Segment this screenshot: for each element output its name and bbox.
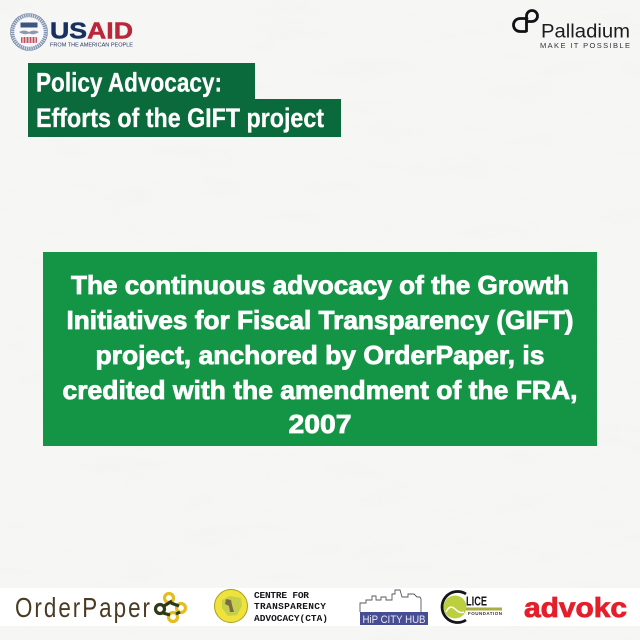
message text: credited with the amendment of the FRA,: [62, 375, 578, 405]
USAID wordmark: USAID: [50, 18, 133, 44]
strip background: [0, 588, 640, 626]
title background: [28, 63, 341, 137]
message text: 2007: [288, 409, 352, 439]
CTA name: CENTRE FOR: [254, 590, 309, 601]
logo: Hip City Hub: HiP CITY HUB: [362, 614, 426, 626]
logo: Hip City Hub: [360, 590, 428, 626]
Clice name: LICE: [466, 594, 487, 608]
logo: USAID: [10, 14, 133, 50]
partner logo strip: [0, 588, 640, 626]
CTA name: [254, 590, 328, 624]
USAID tagline: FROM THE AMERICAN PEOPLE: [50, 42, 133, 48]
Palladium tagline: MAKE IT POSSIBLE: [540, 41, 630, 50]
logo: Centre for Transparency Advocacy: [214, 590, 328, 624]
panel: key message: [43, 252, 597, 446]
message text: Initiatives for Fiscal Transparency (GIFT): [66, 305, 574, 335]
logo: advokc: advokc: [524, 592, 627, 623]
OrderPaper wordmark: OrderPaper: [15, 593, 152, 624]
Hip City Hub label: [360, 612, 428, 625]
icon: OrderPaper knot: [156, 594, 186, 622]
logo: OrderPaper: [15, 593, 186, 624]
icon: skyline: [360, 590, 421, 612]
title banner: [28, 63, 341, 137]
CTA name: ADVOCACY(CTA): [254, 613, 328, 624]
message text: project, anchored by OrderPaper, is: [96, 340, 544, 370]
icon: CTA emblem: [214, 590, 248, 622]
icon: Clice ring: [442, 591, 466, 622]
title line 2: Efforts of the GIFT project: [36, 103, 324, 133]
title line 1: Policy Advocacy:: [36, 68, 222, 98]
icon: Palladium linked loops: [514, 10, 538, 32]
icon: USAID seal: [10, 14, 48, 50]
Palladium wordmark: Palladium: [541, 22, 630, 42]
message text: [62, 270, 578, 439]
message background: [43, 252, 597, 446]
Clice foundation label: FOUNDATION: [468, 611, 502, 616]
logo: Palladium: [514, 10, 630, 50]
logo: Clice Foundation: [442, 591, 502, 622]
Clice bar: [466, 608, 502, 610]
CTA name: TRANSPARENCY: [254, 601, 326, 612]
message text: The continuous advocacy of the Growth: [71, 270, 569, 300]
